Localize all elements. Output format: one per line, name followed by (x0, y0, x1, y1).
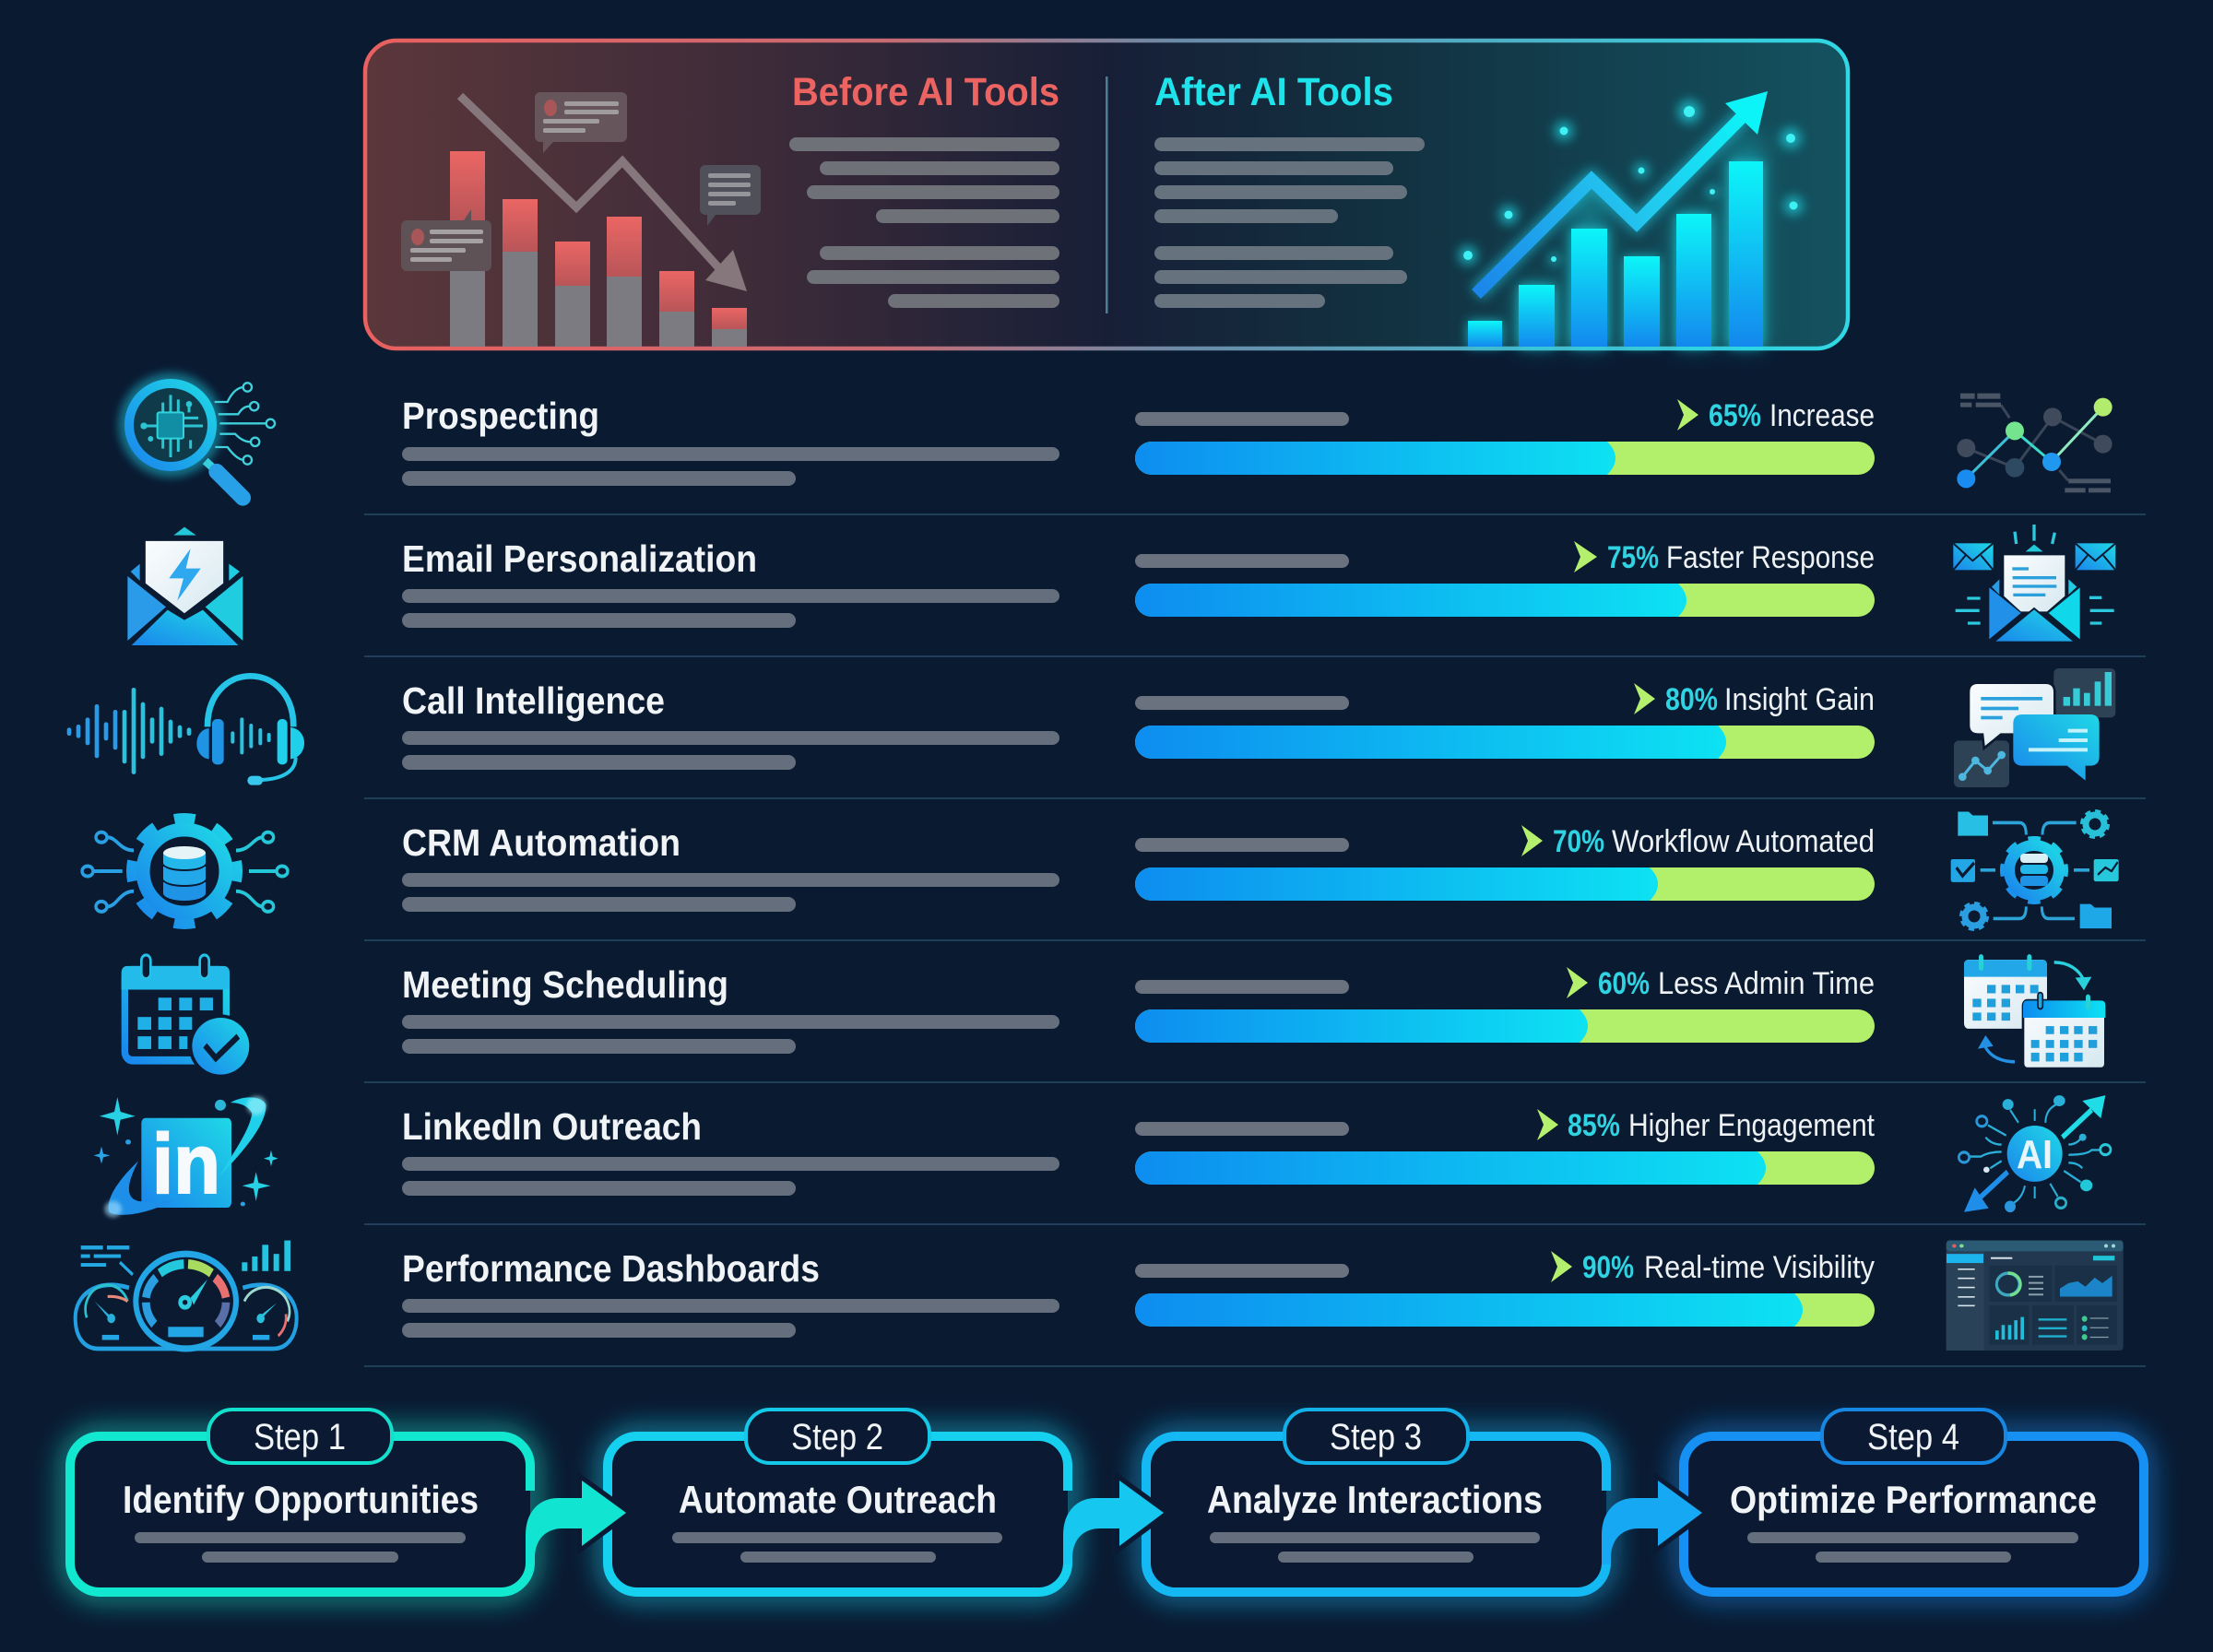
bar label (1135, 554, 1349, 568)
text lines: after (1154, 137, 1425, 308)
metric: 75% (1607, 540, 1659, 575)
heading: after: After AI Tools (1154, 70, 1393, 114)
heading: Prospecting (402, 395, 599, 437)
divider (1106, 77, 1108, 313)
bar label (1135, 838, 1349, 852)
step 2 card (608, 1410, 1068, 1592)
arrow: declining trend (460, 96, 747, 291)
description lines (402, 589, 1059, 628)
row: Prospecting (402, 395, 1875, 486)
icon: network nodes (1957, 394, 2112, 492)
metric (1634, 682, 1875, 717)
arrow: step 3 to step 4 (1602, 1471, 1710, 1564)
bar label (1135, 980, 1349, 994)
chat bubble: left (401, 209, 491, 271)
card text lines (1210, 1532, 1540, 1563)
card title: Analyze Interactions (1207, 1478, 1543, 1521)
metric: Insight Gain (1724, 682, 1875, 717)
panel: before and after AI tools (365, 41, 1848, 348)
arrow: step 2 to step 3 (1063, 1471, 1172, 1564)
row: Performance Dashboards (402, 1247, 1875, 1338)
icon: chat bubbles and charts (1954, 668, 2115, 787)
metric (1677, 398, 1875, 433)
card title: Automate Outreach (679, 1478, 997, 1521)
icon: AI with arrows (1959, 1095, 2111, 1212)
description lines (402, 1157, 1059, 1196)
description lines (402, 1299, 1059, 1338)
icon: LinkedIn (94, 1096, 278, 1217)
metric: Faster Response (1666, 540, 1875, 575)
icon: gear with database (82, 820, 288, 923)
progress bar (1135, 1151, 1875, 1185)
progress bar (1135, 1009, 1875, 1043)
heading: Meeting Scheduling (402, 963, 728, 1006)
chat bubble: right (700, 165, 761, 226)
pill: step label (1822, 1410, 2006, 1463)
metric: Real-time Visibility (1644, 1250, 1875, 1285)
metric: 65% (1709, 398, 1761, 433)
divider line (364, 1365, 2146, 1367)
progress bar (1135, 726, 1875, 759)
metric: 80% (1665, 682, 1718, 717)
metric (1537, 1108, 1875, 1143)
description lines (402, 447, 1059, 486)
row: CRM Automation (402, 821, 1875, 912)
description lines (402, 873, 1059, 912)
row: LinkedIn Outreach (402, 1105, 1875, 1196)
bar label (1135, 1264, 1349, 1278)
divider line (364, 939, 2146, 941)
icon: AI with arrows: AI (2017, 1132, 2053, 1177)
icon: magnifier with chip (118, 372, 275, 498)
chart: declining bars (450, 151, 747, 347)
metric: Higher Engagement (1628, 1108, 1875, 1143)
card text lines (672, 1532, 1002, 1563)
divider line (364, 797, 2146, 799)
heading: Email Personalization (402, 537, 757, 580)
card text lines (135, 1532, 466, 1563)
icon: two calendars (1964, 954, 2105, 1068)
metric: 70% (1553, 824, 1604, 859)
card title: Identify Opportunities (123, 1478, 479, 1521)
bar label (1135, 696, 1349, 710)
bar label (1135, 412, 1349, 426)
chart: rising bars with arrow (1459, 91, 1803, 347)
icon: dashboard screen (1947, 1241, 2124, 1351)
row: Email Personalization (402, 537, 1875, 628)
arrow: step 1 to step 2 (526, 1471, 634, 1564)
pill: step label (746, 1410, 929, 1463)
heading: Call Intelligence (402, 679, 665, 722)
divider line (364, 655, 2146, 657)
icon: CRM workflow (1951, 811, 2119, 929)
pill: step label (208, 1410, 392, 1463)
metric (1551, 1250, 1875, 1285)
progress bar (1135, 1293, 1875, 1327)
progress bar (1135, 867, 1875, 901)
heading: LinkedIn Outreach (402, 1105, 702, 1148)
icon: envelopes with document (1953, 525, 2115, 643)
pill: step label: Step 3 (1330, 1417, 1422, 1457)
bar label (1135, 1122, 1349, 1136)
divider line (364, 1081, 2146, 1083)
row: Meeting Scheduling (402, 963, 1875, 1054)
metric: Less Admin Time (1658, 966, 1875, 1001)
metric (1574, 540, 1875, 575)
divider line (364, 513, 2146, 515)
description lines (402, 731, 1059, 770)
description lines (402, 1015, 1059, 1054)
heading: before: Before AI Tools (792, 70, 1059, 114)
pill: step label: Step 4 (1867, 1417, 1959, 1457)
step 3 card (1146, 1410, 1606, 1592)
heading: CRM Automation (402, 821, 680, 864)
metric (1521, 824, 1875, 859)
card title: Optimize Performance (1730, 1478, 2097, 1521)
pill: step label: Step 2 (791, 1417, 883, 1457)
step 1 card (70, 1410, 530, 1592)
heading: Performance Dashboards (402, 1247, 820, 1290)
metric: 85% (1568, 1108, 1620, 1143)
metric: 90% (1582, 1250, 1634, 1285)
pill: step label: Step 1 (254, 1417, 346, 1457)
metric: Workflow Automated (1612, 824, 1875, 859)
row: Call Intelligence (402, 679, 1875, 770)
progress bar (1135, 442, 1875, 475)
step 4 card (1684, 1410, 2144, 1592)
card text lines (1747, 1532, 2078, 1563)
icon: LinkedIn: in (152, 1117, 220, 1211)
icon: calendar with check (122, 955, 253, 1078)
icon: envelope with lightning bolt (127, 527, 243, 645)
text lines: before (789, 137, 1059, 308)
icon: speedometer dashboard (76, 1241, 297, 1349)
icon: waveform and headset (67, 676, 304, 785)
metric: Increase (1769, 398, 1875, 433)
progress bar (1135, 584, 1875, 617)
chat bubble: top (535, 92, 627, 153)
metric: 60% (1598, 966, 1650, 1001)
pill: step label (1284, 1410, 1468, 1463)
metric (1567, 966, 1875, 1001)
divider line (364, 1223, 2146, 1225)
